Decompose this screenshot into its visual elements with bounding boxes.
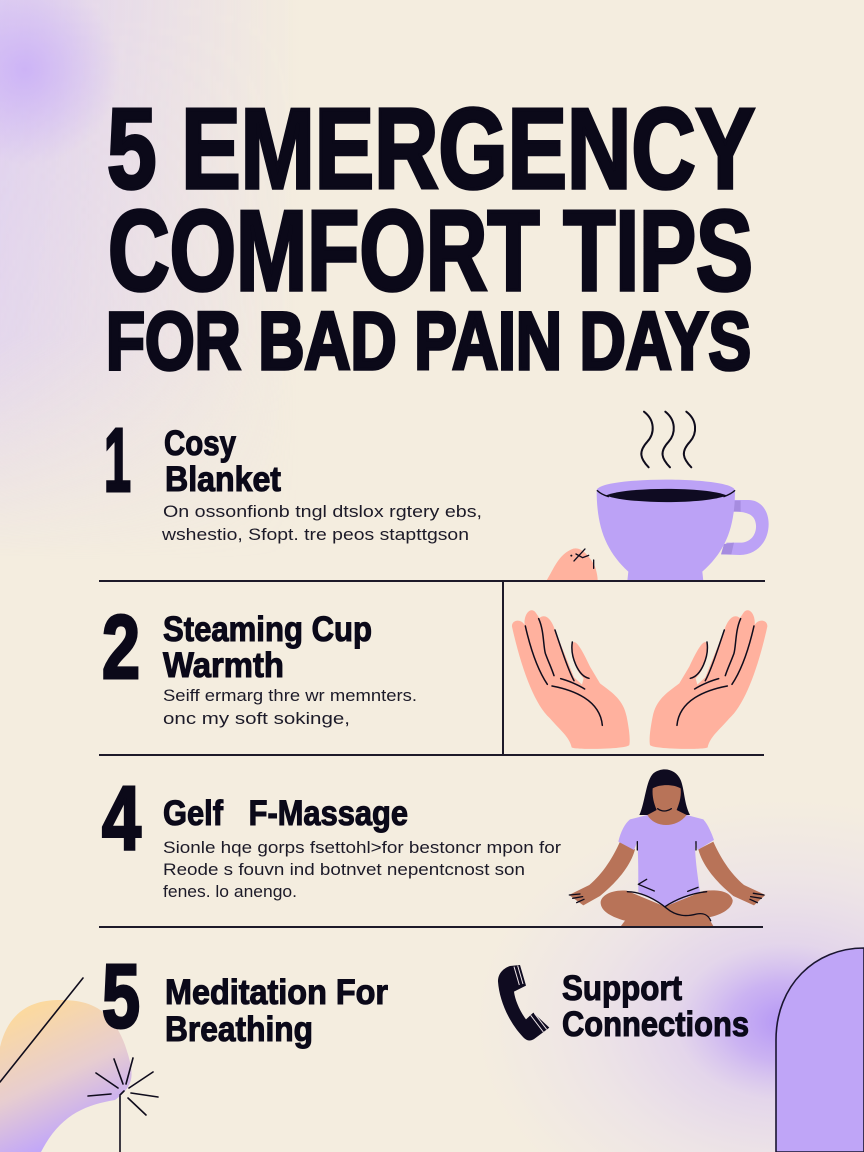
heading: meditation for breathing — [165, 973, 388, 1049]
body text: On ossonfionb tngl dtslox rgtery ebs, — [163, 502, 482, 521]
body text — [163, 838, 561, 901]
cup handle — [722, 500, 769, 555]
support connections — [498, 965, 749, 1044]
icon: meditating person — [569, 769, 765, 926]
arch: bottom right — [776, 948, 864, 1152]
tip 4: self massage — [102, 769, 561, 901]
heading: steaming cup warmth: Warmth — [163, 646, 284, 685]
icon: open hands — [512, 610, 767, 749]
divider lines — [99, 581, 765, 927]
heading: meditation for breathing: Breathing — [165, 1010, 313, 1049]
body text: Seiff ermarg thre wr memnters. — [163, 686, 417, 705]
icon: telephone — [498, 965, 549, 1040]
body text: Reode s fouvn ind botnvet nepentcnost son — [163, 860, 525, 879]
body text — [161, 502, 482, 544]
arms — [569, 842, 765, 905]
body text: onc my soft sokinge, — [163, 709, 350, 728]
right hand — [650, 610, 767, 749]
small hand — [547, 548, 598, 580]
body text: fenes. lo anengo. — [163, 882, 297, 901]
number 1: 1 — [104, 411, 131, 511]
heading: steaming cup warmth — [163, 610, 372, 685]
blob: bottom left — [0, 1000, 132, 1152]
heading: cosy blanket: Cosy — [164, 424, 236, 463]
heading: steaming cup warmth: Steaming Cup — [163, 610, 372, 649]
tip 5: meditation for breathing — [102, 947, 388, 1049]
decorative burst and lines — [0, 978, 158, 1152]
number 2: 2 — [102, 598, 140, 698]
steam — [641, 412, 695, 467]
coffee — [606, 489, 727, 502]
icon: steaming cup — [547, 412, 769, 581]
heading: gelf f-massage: Gelf F-Massage — [163, 794, 408, 833]
number 5: 5 — [102, 947, 140, 1047]
cup body — [597, 480, 735, 581]
title — [106, 86, 755, 387]
neck and face — [647, 785, 687, 825]
detail lines — [569, 809, 764, 921]
left hand — [512, 610, 630, 749]
body text — [163, 686, 417, 728]
tip 2: steaming cup warmth — [102, 598, 417, 728]
body text: Sionle hqe gorps fsettohl>for bestoncr mpon for — [163, 838, 561, 857]
shirt — [618, 815, 714, 907]
heading: meditation for breathing: Meditation For — [165, 973, 388, 1012]
hair — [639, 769, 690, 815]
label: Support — [562, 969, 682, 1008]
number 4: 4 — [102, 769, 141, 869]
heading: cosy blanket: Blanket — [165, 460, 281, 499]
label — [562, 969, 749, 1044]
label: Connections — [562, 1005, 749, 1044]
tip 1: cosy blanket — [104, 411, 482, 544]
heading: cosy blanket — [164, 424, 281, 499]
legs — [601, 890, 733, 926]
body text: wshestio, Sfopt. tre peos stapttgson — [161, 525, 469, 544]
